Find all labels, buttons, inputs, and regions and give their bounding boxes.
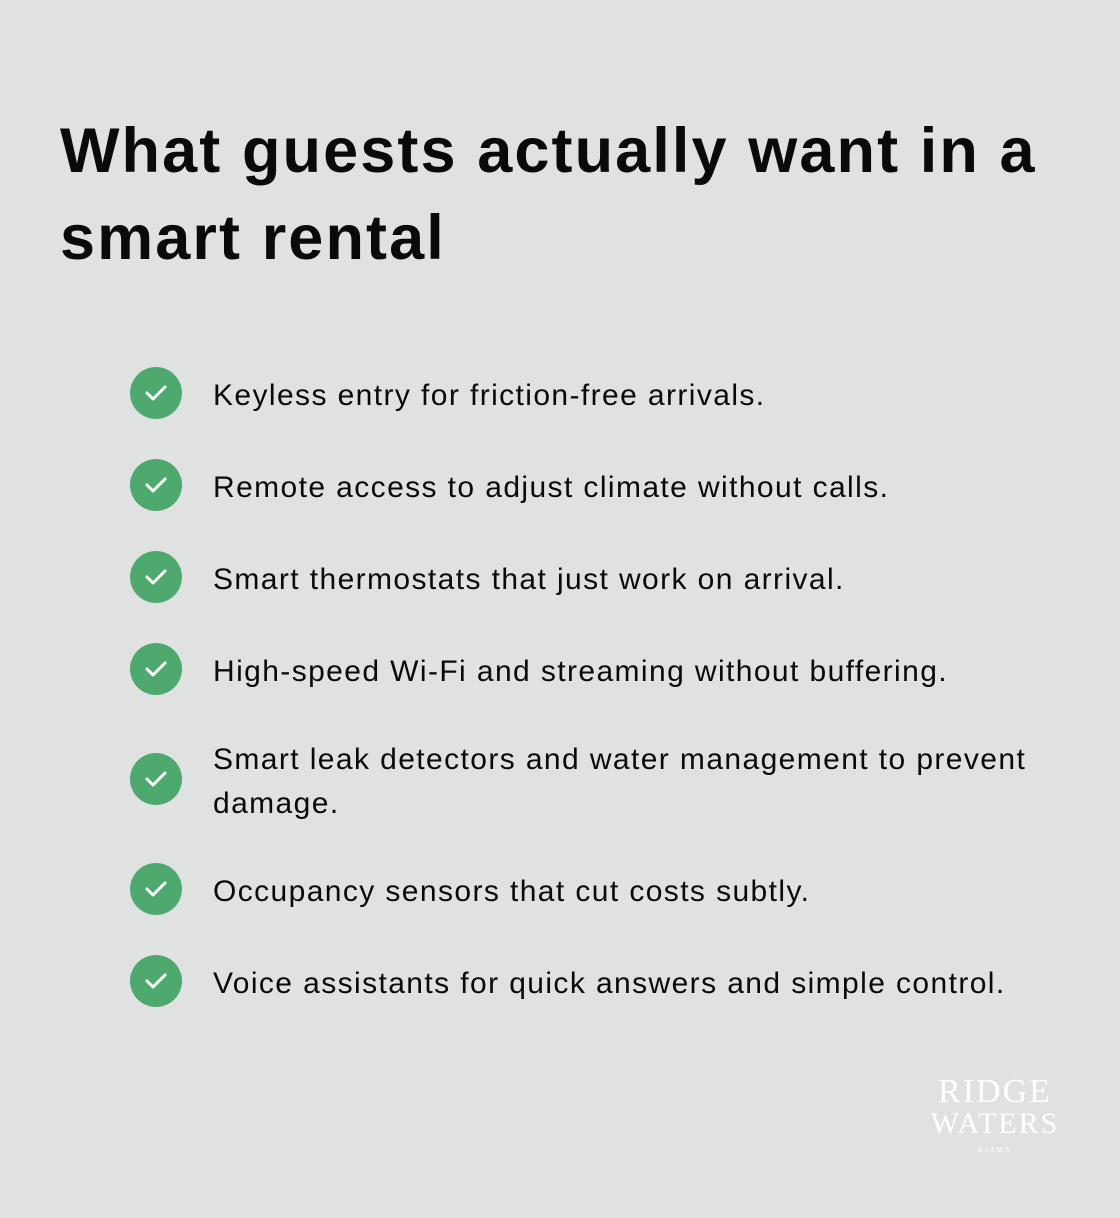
item 5: damage.	[213, 787, 340, 820]
item 2: Remote access to adjust climate without calls.	[213, 471, 889, 504]
item 4	[130, 643, 948, 695]
item 5: Smart leak detectors and water management to prevent	[213, 743, 1026, 776]
item 5	[130, 743, 1026, 820]
logo: WATERS	[931, 1107, 1059, 1140]
item 1: Keyless entry for friction-free arrivals.	[213, 379, 766, 412]
logo: RIDGE	[938, 1073, 1052, 1110]
title: What guests actually want in a smart rental	[60, 116, 1037, 273]
item 6	[130, 863, 810, 915]
logo: KIAMA	[978, 1146, 1012, 1154]
item 7	[130, 955, 1006, 1007]
item 1	[130, 367, 766, 419]
item 4: High-speed Wi-Fi and streaming without buffering.	[213, 655, 948, 688]
logo	[930, 1073, 1059, 1154]
item 2	[130, 459, 889, 511]
item 7: Voice assistants for quick answers and simple control.	[213, 967, 1006, 1000]
item 6: Occupancy sensors that cut costs subtly.	[213, 875, 810, 908]
item 3: Smart thermostats that just work on arrival.	[213, 563, 845, 596]
item 3	[130, 551, 845, 603]
